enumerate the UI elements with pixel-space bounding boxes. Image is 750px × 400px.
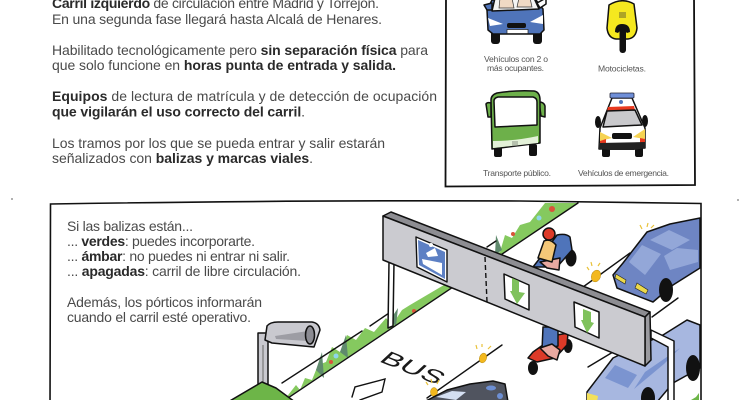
blue car: lower <box>587 320 700 400</box>
icon: ambulance <box>595 93 648 157</box>
label: motorcycles: Motocicletas. <box>598 64 646 74</box>
moto: lower rider <box>528 327 572 375</box>
label: emergency vehicles: Vehículos de emergencia. <box>578 168 669 178</box>
label: public transport: Transporte público. <box>483 168 551 178</box>
text block: description of the lane: que vigilarán el uso correcto del carril. <box>52 104 305 120</box>
label: vehicles with occupants: más ocupantes. <box>487 63 544 73</box>
lane line with amber beacons <box>426 344 502 398</box>
icon: green down arrow 2 <box>574 302 599 338</box>
panel: road scene <box>50 201 701 400</box>
road marking: BUS: BUS <box>374 348 451 388</box>
text block: beacon meanings: ... verdes: puedes incorporarte. <box>67 233 255 249</box>
text block: description of the lane: En una segunda fase llegará hasta Alcalá de Henares. <box>52 11 382 27</box>
icon: green down arrow 1 <box>504 274 529 310</box>
text block: description of the lane: Equipos de lectura de matrícula y de detección de ocupación <box>52 88 437 104</box>
text block: description of the lane: señalizados con balizas y marcas viales. <box>52 150 313 166</box>
text block: beacon meanings: Si las balizas están... <box>67 218 193 234</box>
median grass strip <box>282 203 578 400</box>
text block: beacon meanings: cuando el carril esté operativo. <box>67 309 251 325</box>
label: vehicles with occupants: Vehículos con 2 o <box>484 54 548 64</box>
dark car <box>424 381 508 400</box>
blue car: upper <box>613 218 700 302</box>
upper lane lines <box>583 253 678 367</box>
label: vehicles with occupants <box>484 54 548 73</box>
gantry sign <box>383 212 651 366</box>
road marking: arrow <box>352 379 385 400</box>
text block: description of the lane: que solo funcione en horas punta de entrada y salida. <box>52 57 396 73</box>
text block: beacon meanings: Además, los pórticos informarán <box>67 294 262 310</box>
icon: Bus-VAO blue sign <box>416 237 447 282</box>
text block: description of the lane: Habilitado tecnológicamente pero sin separación física para <box>52 42 428 58</box>
beacon on right lane <box>587 223 654 283</box>
text block: description of the lane: Los tramos por los que se pueda entrar y salir estarán <box>52 135 385 151</box>
text block: beacon meanings: ... apagadas: carril de libre circulación. <box>67 263 301 279</box>
security camera <box>258 322 320 386</box>
icon: green bus <box>486 91 545 157</box>
text block: beacon meanings: ... ámbar: no puedes ni entrar ni salir. <box>67 248 290 264</box>
green mound <box>228 382 295 400</box>
icon: yellow motorcycle <box>607 1 637 53</box>
gantry support posts <box>388 262 674 400</box>
icon: blue car with two occupants <box>484 0 546 44</box>
panel: permitted vehicles <box>446 0 695 186</box>
text block: beacon meanings <box>67 218 301 325</box>
text block: description of the lane <box>52 0 437 166</box>
moto: upper rider <box>533 228 576 270</box>
